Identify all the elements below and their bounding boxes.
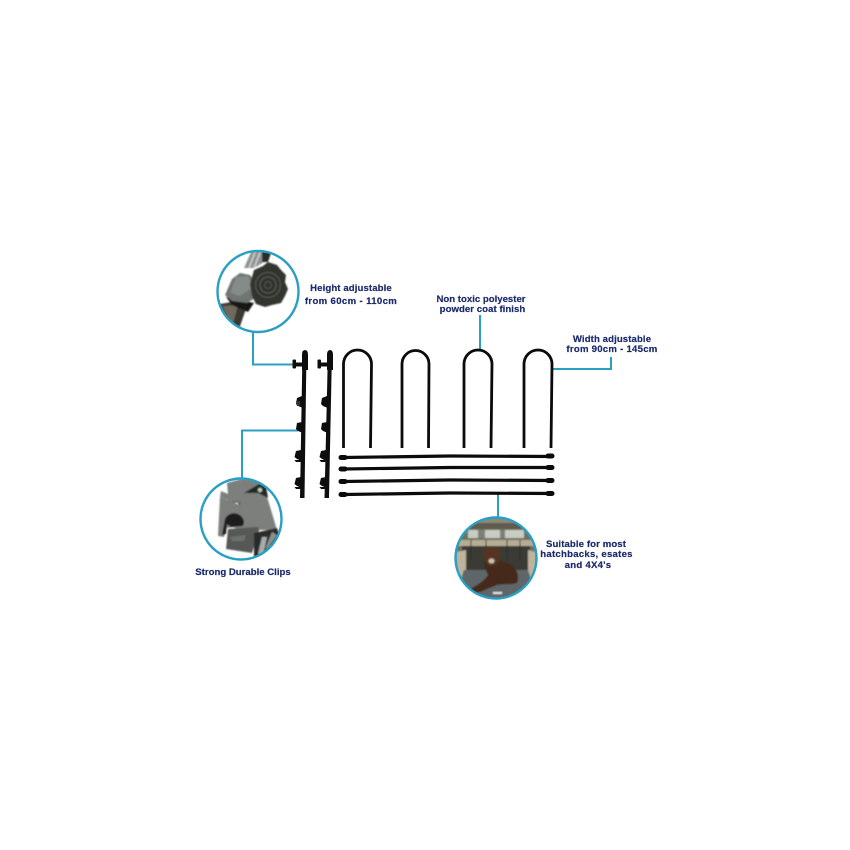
label: strong durable clips: Strong Durable Clips — [195, 567, 291, 578]
lower arm — [220, 302, 246, 327]
leader line: powder coat finish — [479, 315, 481, 350]
right upright post with knob and clips — [318, 350, 333, 498]
label: height adjustable: Height adjustable — [310, 283, 392, 294]
leader line: strong durable clips — [242, 430, 298, 479]
teal ring — [456, 518, 536, 598]
leader line: suitable vehicles — [497, 494, 499, 518]
label: height adjustable: from 60cm - 110cm — [305, 296, 397, 307]
horizontal bars — [341, 456, 552, 494]
label: width adjustable: Width adjustable — [573, 334, 651, 345]
hook — [217, 496, 240, 538]
U-shaped hoop 2 — [402, 350, 429, 448]
lower jaw — [226, 527, 259, 553]
left upright post with knob and clips — [292, 350, 308, 498]
black under clamp — [226, 297, 254, 312]
U-shaped hoop 1 — [344, 350, 372, 448]
U-shaped hoop 3 — [464, 350, 492, 448]
leader line: height adjustable — [253, 331, 296, 364]
teal ring — [200, 478, 282, 560]
label: suitable vehicles: and 4X4's — [565, 560, 611, 571]
photo callout: height adjustment knob — [216, 250, 299, 332]
label: non toxic finish: powder coat finish — [440, 304, 525, 315]
leader line: width adjustable — [553, 357, 611, 369]
rods — [244, 252, 264, 269]
photo callout: dog in car boot — [454, 517, 538, 600]
U-shaped hoop 4 — [524, 350, 552, 448]
photo callout: clip close-up — [200, 478, 282, 560]
label: suitable vehicles: Suitable for most — [546, 539, 627, 550]
label: width adjustable: from 90cm - 145cm — [566, 344, 658, 355]
clamp body — [225, 273, 256, 303]
upper body — [220, 478, 277, 530]
knob — [250, 262, 288, 307]
label: suitable vehicles: hatchbacks, esates — [540, 549, 633, 560]
label: non toxic finish: Non toxic polyester — [436, 294, 526, 305]
teal ring — [218, 251, 298, 332]
dog — [471, 560, 519, 593]
